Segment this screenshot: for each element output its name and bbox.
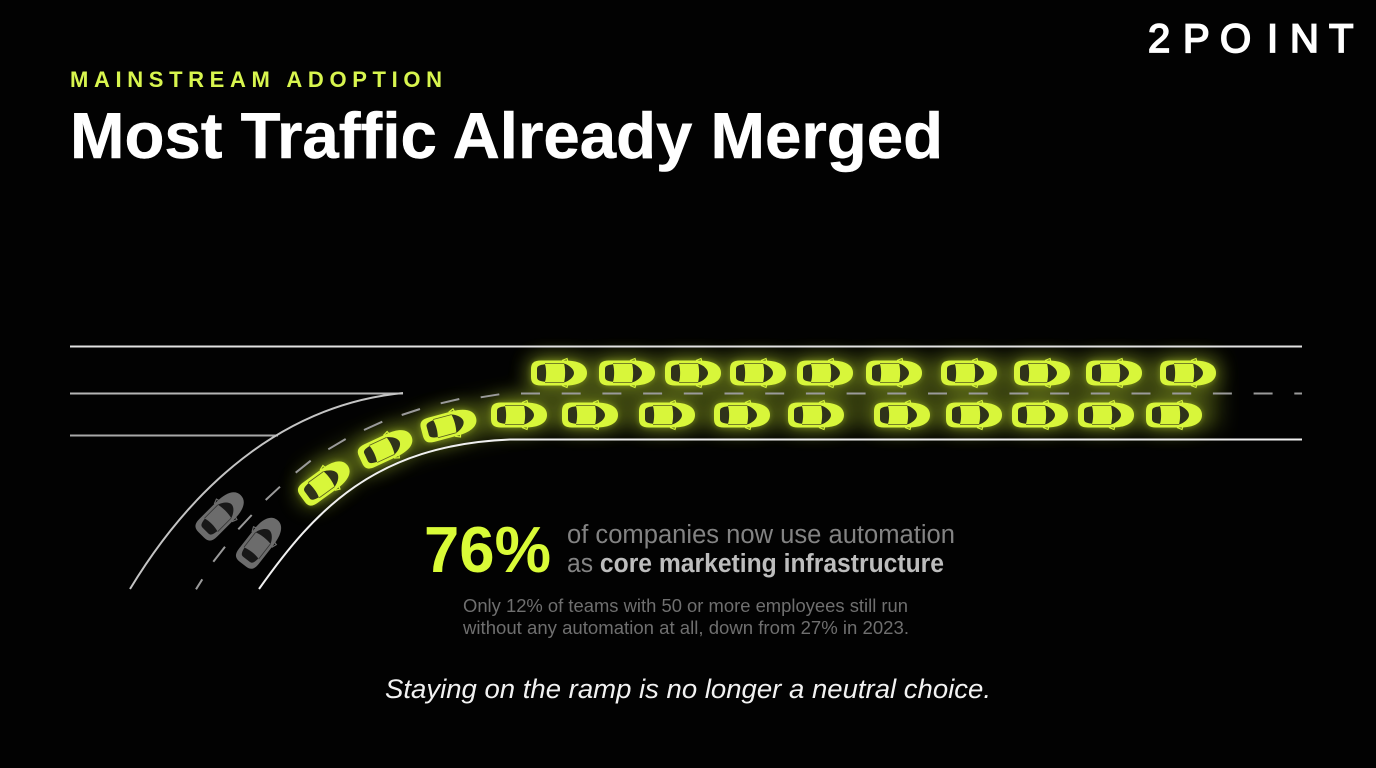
statistic: 76%: 76%	[424, 513, 551, 586]
yellow cars merging on the curve	[294, 404, 480, 510]
road lines	[70, 346, 1302, 589]
logo: 2POINT: 2POINT	[1148, 17, 1353, 61]
supporting note: Only 12% of teams with 50 or more employees still run	[463, 596, 908, 616]
statistic description line 2: as core marketing infrastructure	[567, 550, 944, 578]
supporting note	[462, 596, 909, 638]
eyebrow label: MAINSTREAM ADOPTION	[70, 67, 442, 92]
closing statement: Staying on the ramp is no longer a neutral choice.	[385, 674, 991, 704]
glow around yellow cars	[295, 358, 1220, 509]
yellow cars: bottom lane	[491, 400, 1202, 430]
gray cars on the ramp	[191, 485, 289, 573]
statistic description line 1: of companies now use automation	[567, 521, 955, 549]
supporting note: without any automation at all, down from 27% in 2023.	[462, 618, 909, 638]
title: Most Traffic Already Merged	[70, 99, 943, 172]
yellow cars: top lane	[531, 358, 1216, 388]
